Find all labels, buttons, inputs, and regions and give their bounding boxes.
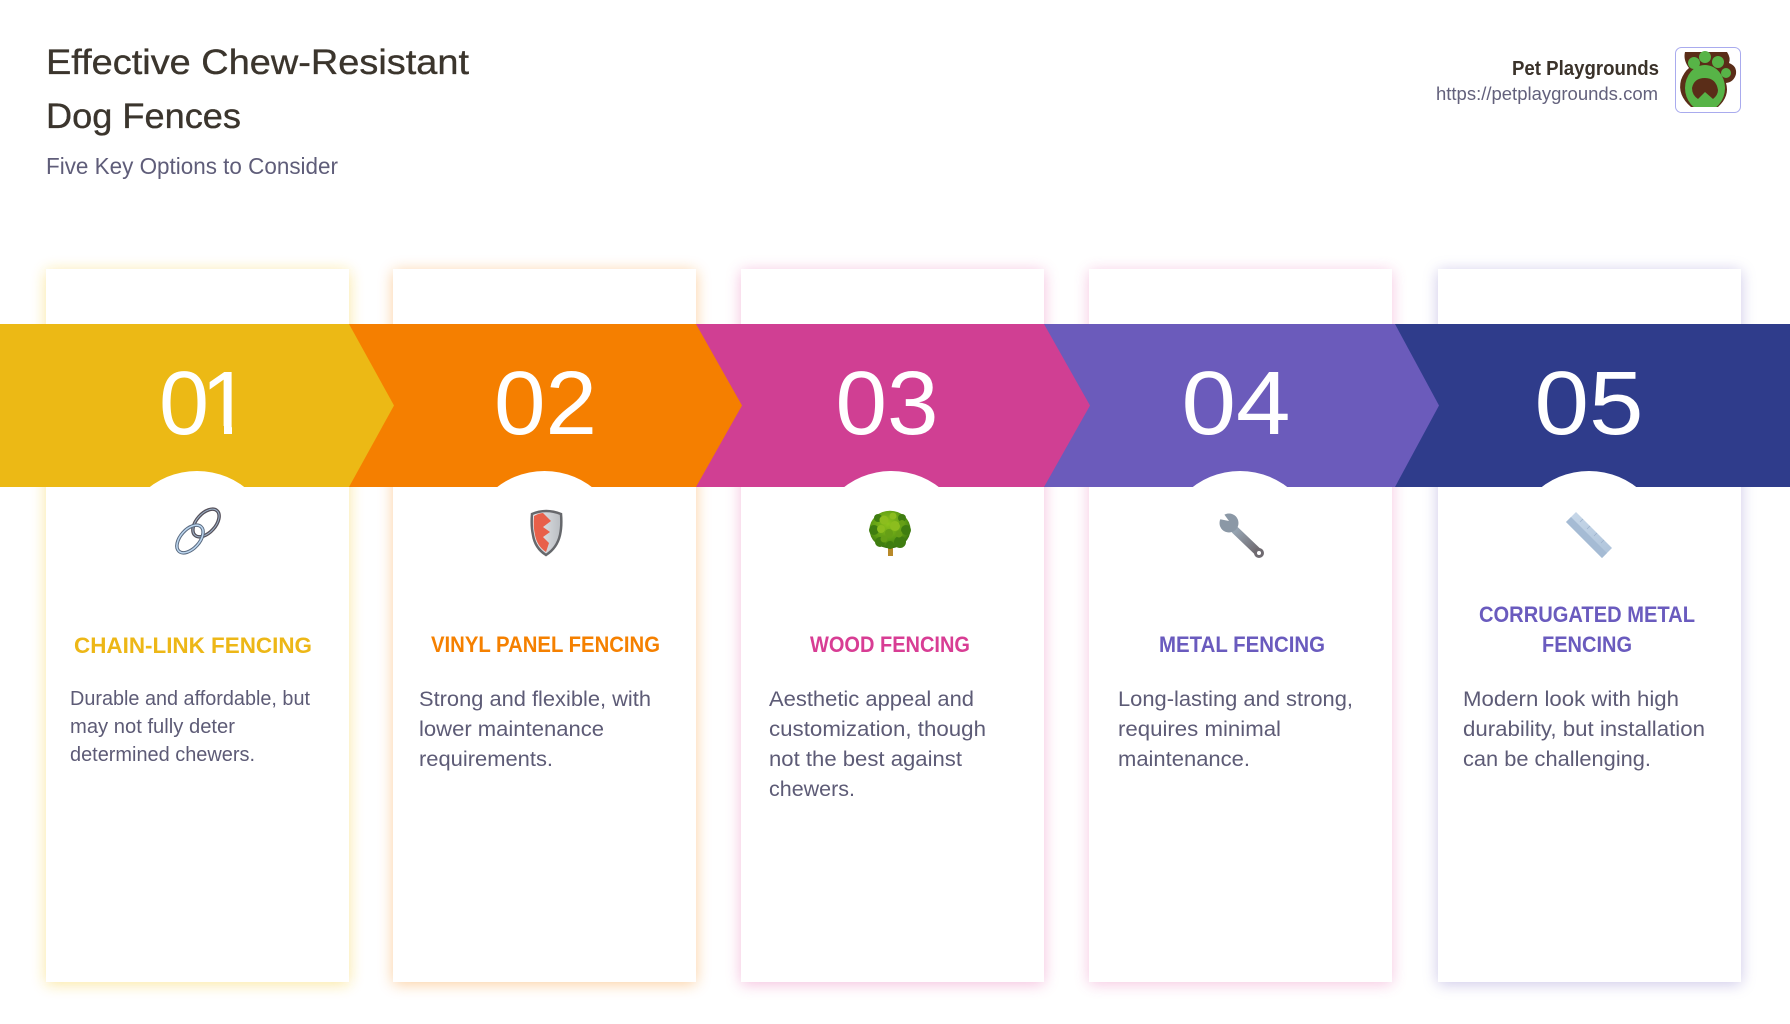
description: requires minimal <box>1118 718 1281 741</box>
description <box>769 688 986 801</box>
heading: CHAIN-LINK FENCING <box>74 633 312 658</box>
brand block <box>1436 48 1740 112</box>
description: determined chewers. <box>70 744 255 766</box>
description: Durable and affordable, but <box>70 688 310 710</box>
description: Aesthetic appeal and <box>769 688 974 711</box>
subtitle: Five Key Options to Consider <box>46 153 338 179</box>
panel: card 4 background <box>1089 269 1392 984</box>
description: may not fully deter <box>70 716 235 738</box>
description: Long-lasting and strong, <box>1118 688 1353 711</box>
description <box>419 688 651 771</box>
number 03: 03 <box>836 354 938 454</box>
step 2 <box>419 354 660 771</box>
description: lower maintenance <box>419 718 604 741</box>
heading: VINYL PANEL FENCING <box>431 632 660 657</box>
description: customization, though <box>769 718 986 741</box>
panel: card 5 background <box>1438 269 1741 984</box>
number 01: 0 <box>159 354 209 454</box>
arrow band <box>0 324 1790 487</box>
panel: card 3 background <box>741 269 1044 984</box>
number 05: 05 <box>1534 354 1644 454</box>
heading: WOOD FENCING <box>810 632 970 657</box>
heading: FENCING <box>1542 632 1632 657</box>
description: durability, but installation <box>1463 718 1705 741</box>
description: Strong and flexible, with <box>419 688 651 711</box>
number 01: 1 <box>201 354 251 454</box>
number 01 <box>162 371 232 435</box>
description <box>1118 688 1353 771</box>
title: Dog Fences <box>46 97 241 136</box>
icon: paw logo <box>1676 48 1740 112</box>
description: maintenance. <box>1118 748 1250 771</box>
brand name: Pet Playgrounds <box>1512 58 1659 80</box>
description: can be challenging. <box>1463 748 1651 771</box>
icon: tree <box>869 511 911 556</box>
title: Effective Chew-Resistant <box>46 43 469 82</box>
icon: chain link <box>172 504 224 558</box>
description <box>1463 688 1705 771</box>
step 1 <box>70 354 312 766</box>
description <box>70 688 310 766</box>
brand url: https://petplaygrounds.com <box>1436 84 1658 104</box>
number 04: 04 <box>1182 354 1290 454</box>
icon: metal bar <box>1566 512 1612 558</box>
description: not the best against <box>769 748 962 771</box>
title <box>46 43 469 136</box>
panel: card 1 background <box>46 269 349 984</box>
heading: METAL FENCING <box>1159 632 1325 657</box>
step 3 <box>769 354 986 801</box>
heading <box>1479 602 1695 657</box>
step 5 <box>1463 354 1705 771</box>
icon: shield <box>532 511 561 555</box>
description: requirements. <box>419 748 553 771</box>
heading: CORRUGATED METAL <box>1479 602 1695 627</box>
number 02: 02 <box>494 354 597 454</box>
description: Modern look with high <box>1463 688 1679 711</box>
description: chewers. <box>769 778 855 801</box>
step 4 <box>1118 354 1353 771</box>
icon: wrench <box>1214 510 1264 558</box>
panel: card 2 background <box>393 269 696 984</box>
